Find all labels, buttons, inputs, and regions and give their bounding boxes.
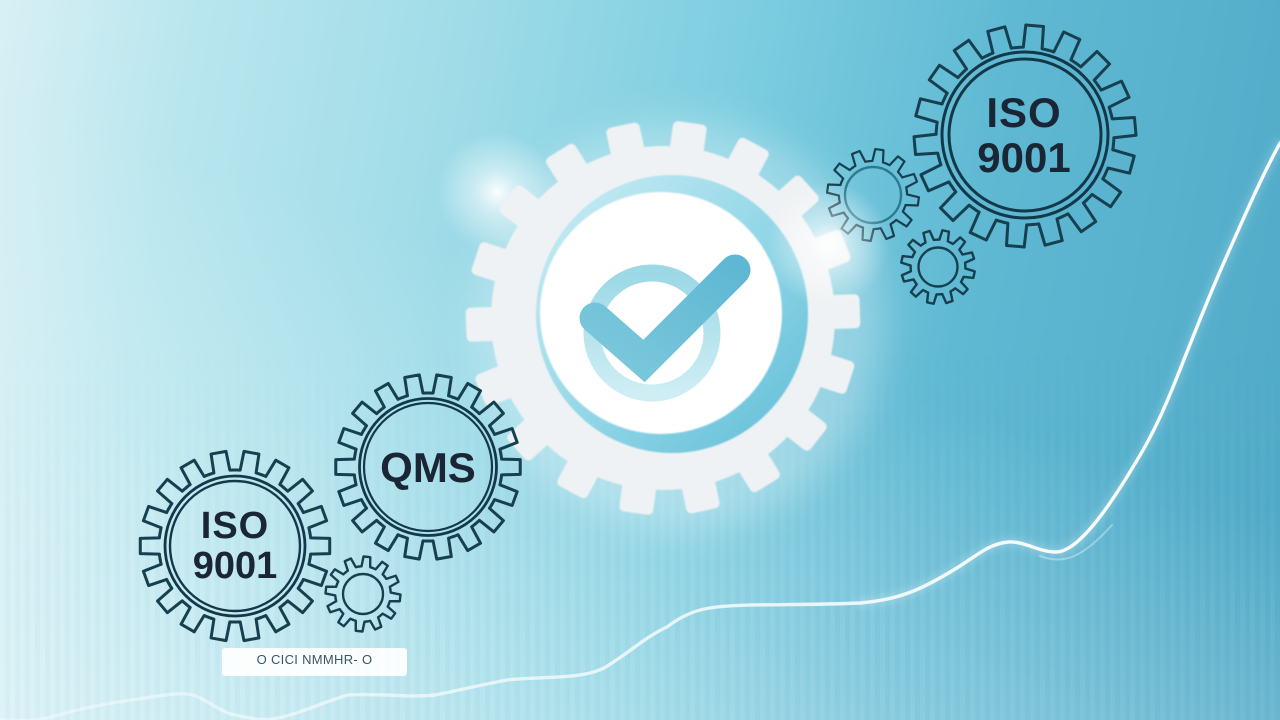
glow: right of central gear [766, 183, 890, 307]
icon: small gear lower right [894, 223, 982, 311]
icon: central white gear with checkmark [466, 121, 860, 515]
checkmark [595, 270, 735, 361]
gear label: ISO 9001: ISO [201, 505, 269, 547]
icon: QMS gear [320, 360, 536, 574]
gear body [466, 121, 860, 515]
gear label: QMS: QMS [380, 444, 476, 491]
caption label [222, 648, 407, 676]
caption label: O CICI NMMHR- O [257, 652, 372, 667]
white disc [540, 192, 782, 434]
icon: ISO 9001 gear lower left [124, 436, 346, 656]
icon: ISO 9001 gear upper right [904, 16, 1146, 256]
icon: small gear lower left [322, 553, 404, 635]
blue ring [536, 175, 808, 453]
icon: small gear upper middle [821, 143, 925, 247]
inner ring [592, 273, 712, 393]
glow: behind central gear [437, 120, 885, 530]
gear label: ISO 9001: ISO [986, 89, 1062, 136]
gear label: ISO 9001: 9001 [193, 545, 277, 587]
gear label: ISO 9001: 9001 [977, 134, 1071, 181]
